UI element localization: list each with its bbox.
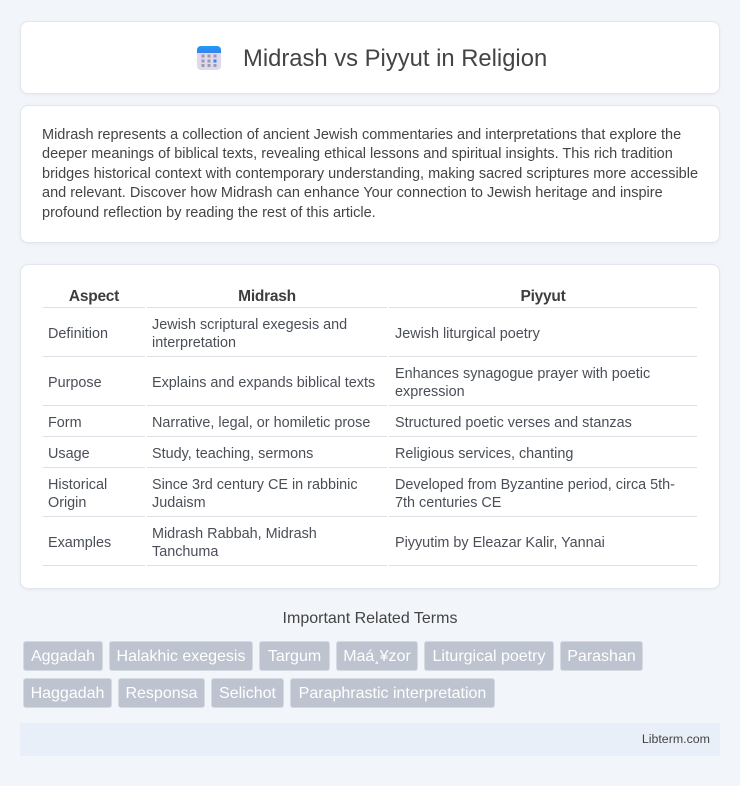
intro text: and relevant. Discover how Midrash can enhance Your connection to Jewish heritage and inspire: [42, 185, 663, 201]
comparison table: Piyyutim by Eleazar Kalir, Yannai: [395, 535, 605, 551]
intro text: deeper meanings of biblical texts, revealing ethical lessons and spiritual insights. This rich tradition: [42, 146, 673, 162]
comparison table: 7th centuries CE: [395, 495, 501, 511]
comparison table: Usage: [48, 446, 90, 462]
comparison table: Explains and expands biblical texts: [152, 375, 375, 391]
related terms heading: Important Related Terms: [283, 610, 457, 627]
comparison table: Judaism: [152, 495, 206, 511]
comparison table: Definition: [48, 326, 108, 342]
comparison table: Jewish liturgical poetry: [395, 326, 540, 342]
comparison table: Examples: [48, 535, 111, 551]
icon: calendar: [197, 46, 221, 70]
related terms tags: Halakhic exegesis: [117, 648, 245, 665]
related terms tags: [23, 641, 643, 708]
comparison table: Midrash: [238, 288, 296, 305]
related terms tags: Maá¸¥zor: [343, 648, 411, 665]
comparison table: Narrative, legal, or homiletic prose: [152, 415, 370, 431]
intro panel: [20, 105, 720, 243]
comparison table: Midrash Rabbah, Midrash: [152, 526, 317, 542]
comparison table: Piyyut: [520, 288, 566, 305]
comparison table: Since 3rd century CE in rabbinic: [152, 477, 358, 493]
related terms tags: Haggadah: [31, 685, 104, 702]
comparison table: [43, 288, 697, 566]
comparison table: Aspect: [69, 288, 119, 305]
title: Midrash vs Piyyut in Religion: [243, 45, 547, 72]
related terms tags: Paraphrastic interpretation: [299, 685, 486, 702]
comparison table: Tanchuma: [152, 544, 218, 560]
comparison table: Enhances synagogue prayer with poetic: [395, 366, 650, 382]
related terms tags: Aggadah: [31, 648, 95, 665]
intro text: [42, 126, 698, 220]
comparison table: Structured poetic verses and stanzas: [395, 415, 632, 431]
related terms tags: Targum: [268, 648, 321, 665]
comparison table: Study, teaching, sermons: [152, 446, 313, 462]
comparison table: Origin: [48, 495, 86, 511]
comparison table: Developed from Byzantine period, circa 5th-: [395, 477, 675, 493]
comparison table: Purpose: [48, 375, 102, 391]
comparison table: Jewish scriptural exegesis and: [152, 317, 347, 333]
comparison table: Historical: [48, 477, 107, 493]
footer bar: [20, 723, 720, 756]
related terms tags: Responsa: [125, 685, 198, 702]
intro text: bridges historical context with contemporary understanding, making sacred scriptures more accessible: [42, 166, 698, 182]
intro text: profound reflection by reading the rest of this article.: [42, 204, 376, 220]
header card: [20, 21, 720, 94]
comparison table: Religious services, chanting: [395, 446, 573, 462]
related terms tags: Parashan: [567, 648, 636, 665]
comparison table: interpretation: [152, 335, 236, 351]
intro text: Midrash represents a collection of ancient Jewish commentaries and interpretations that explore the: [42, 126, 681, 142]
related terms tags: Liturgical poetry: [433, 648, 545, 665]
comparison table panel: [20, 264, 720, 589]
comparison table: Form: [48, 415, 82, 431]
footer credit: Libterm.com: [642, 732, 710, 746]
related terms tags: Selichot: [219, 685, 276, 702]
comparison table: expression: [395, 384, 465, 400]
